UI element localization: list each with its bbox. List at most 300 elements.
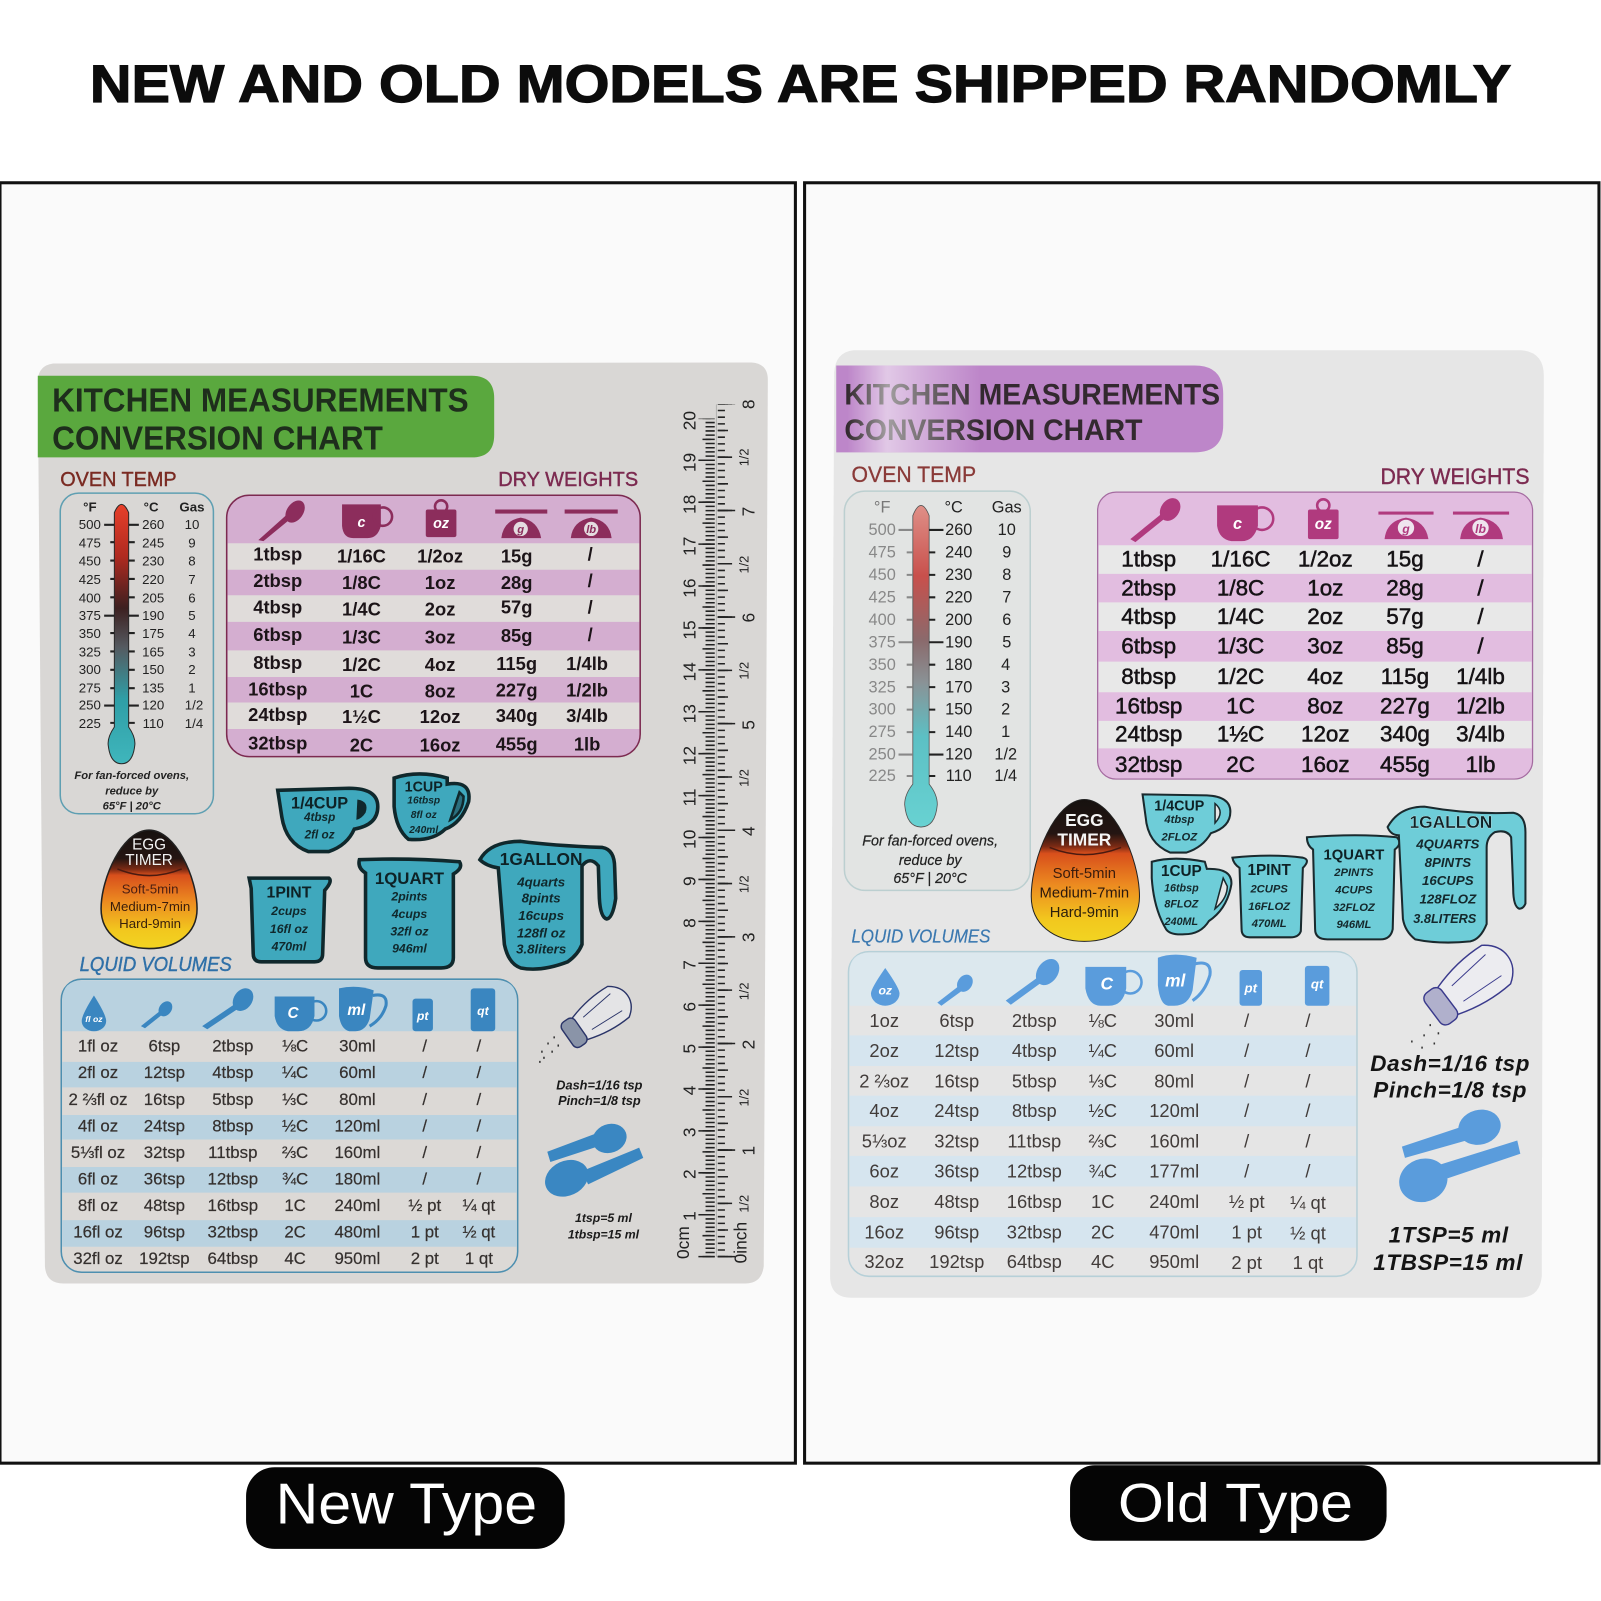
table: liquid volumes: / (422, 1143, 427, 1162)
heading: dry weights: DRY WEIGHTS (1380, 464, 1530, 489)
panel: oven temperature thermometer: 250 (79, 698, 101, 713)
table: dry weights: / (588, 544, 593, 565)
icon: gallon: 4QUARTS (1415, 836, 1480, 851)
table: liquid volumes: 180ml (334, 1169, 380, 1188)
icon: gallon: 3.8LITERS (1413, 911, 1477, 926)
table: liquid volumes: / (1244, 1160, 1250, 1181)
text: teaspoon equivalents: 1TBSP=15 ml (1373, 1250, 1523, 1275)
table: liquid volumes: ¼ qt (462, 1196, 496, 1215)
badge: new type: New Type (276, 1472, 537, 1536)
icon: quart: 946ML (1336, 919, 1372, 931)
icon: gallon: 128fl oz (517, 925, 566, 940)
text: dash and pinch (1370, 1051, 1530, 1103)
panel: oven temperature thermometer: 375 (79, 608, 101, 623)
table: liquid volumes: 950ml (334, 1249, 380, 1268)
table: liquid volumes: 480ml (334, 1223, 380, 1242)
table: liquid volumes: / (477, 1116, 482, 1135)
table: liquid volumes: 16tbsp (1007, 1191, 1062, 1212)
icon: gallon: 8PINTS (1425, 855, 1471, 870)
table: liquid volumes: 120ml (334, 1116, 380, 1135)
table: liquid volumes: 2 pt (411, 1249, 439, 1268)
table: dry weights: 1/2lb (566, 679, 608, 700)
icon: small spoon (141, 999, 175, 1028)
panel: oven temperature thermometer: 4 (188, 626, 196, 641)
panel: oven temperature thermometer: 260 (142, 517, 164, 532)
table: liquid volumes: ½C (1088, 1100, 1117, 1121)
table: liquid volumes: ½ qt (462, 1223, 496, 1242)
icon: quarter cup: 2FLOZ (1161, 831, 1198, 843)
table: liquid volumes: 80ml (339, 1090, 376, 1109)
icon: pint (1232, 856, 1307, 937)
badge: old type: Old Type (1118, 1471, 1353, 1533)
panel: oven temperature thermometer: 230 (945, 566, 972, 584)
icon: thermometer (104, 504, 139, 764)
table: dry weights: 57g (501, 597, 532, 618)
icon: one cup: 8FLOZ (1164, 899, 1199, 911)
table: liquid volumes: 32tsp (934, 1131, 979, 1152)
icon: scale lb: lb (1475, 522, 1486, 536)
table: liquid volumes: 96tsp (144, 1223, 185, 1242)
ruler: cm and inch scale: 2 (739, 1040, 759, 1049)
table: dry weights: 455g (496, 733, 538, 754)
panel: oven temperature thermometer: 9 (1002, 543, 1011, 561)
table: liquid volumes: 4C (1091, 1251, 1114, 1272)
icon: gallon (480, 841, 616, 969)
table: liquid volumes: / (1305, 1100, 1311, 1121)
panel: oven temperature thermometer: 2 (188, 662, 196, 677)
table: liquid volumes: 470ml (1149, 1222, 1199, 1243)
table: liquid volumes: ½ pt (1229, 1191, 1265, 1212)
panel: oven temperature thermometer: 475 (79, 535, 101, 550)
ruler: cm and inch scale: 1/2 (736, 556, 751, 574)
table: dry weights: 8oz (425, 680, 455, 701)
icon: large spoon (1006, 954, 1064, 1005)
panel: oven temperature thermometer: 205 (142, 590, 164, 605)
icon: can qt (471, 988, 495, 1031)
table: liquid volumes: / (477, 1143, 482, 1162)
table: dry weights: 1tbsp (1121, 547, 1176, 572)
ruler: cm and inch scale: 4 (739, 826, 759, 836)
panel: new type card (38, 362, 768, 1283)
text: teaspoon equivalents (568, 1211, 640, 1242)
table: liquid volumes: 11tbsp (1007, 1131, 1061, 1152)
table: dry weights: / (1477, 633, 1484, 658)
table: liquid volumes: 16tsp (144, 1090, 185, 1109)
ruler: cm and inch scale: 9 (679, 876, 699, 886)
icon: egg timer: Hard-9min (1050, 905, 1119, 921)
text: fan-forced note: For fan-forced ovens, (862, 833, 998, 849)
icon: salt shaker (539, 980, 639, 1062)
icon: cup: c (1233, 515, 1242, 533)
text: teaspoon equivalents: 1tsp=5 ml (575, 1211, 632, 1225)
table: liquid volumes: ½C (282, 1116, 308, 1135)
table: dry weights: 2tbsp (253, 570, 302, 591)
icon: small spoon (937, 972, 976, 1006)
table: dry weights: 2C (350, 734, 373, 755)
panel: oven temperature thermometer: 8 (1002, 566, 1011, 584)
icon: one cup: 16tbsp (1164, 882, 1199, 894)
table: liquid volumes: / (1244, 1100, 1250, 1121)
panel: oven temperature thermometer: 225 (869, 767, 896, 785)
table: dry weights: / (1477, 575, 1484, 600)
table: dry weights: 2tbsp (1121, 575, 1176, 600)
table: dry weights: 16tbsp (248, 678, 307, 699)
table: liquid volumes: ⅔C (1088, 1131, 1117, 1152)
panel: oven temperature thermometer: 5 (188, 608, 196, 623)
table: liquid volumes: 2 ⅔oz (859, 1070, 909, 1091)
table: liquid volumes: 2fl oz (78, 1063, 118, 1082)
table: liquid volumes: 4oz (869, 1100, 899, 1121)
ruler: cm and inch scale: 1 (739, 1146, 759, 1156)
icon: scale g: g (516, 524, 524, 536)
icon: quart: 2PINTS (1333, 867, 1374, 879)
table: liquid volumes: / (422, 1037, 427, 1056)
table: liquid volumes: 64tbsp (208, 1249, 258, 1268)
heading: oven temp: OVEN TEMP (852, 462, 976, 487)
icon: scale lb (1453, 512, 1509, 539)
table: liquid volumes: 240ml (1149, 1191, 1199, 1212)
table: dry weights: / (1477, 604, 1484, 629)
ruler: cm and inch scale: 1/2 (736, 983, 751, 1000)
ruler: cm and inch scale: 20 (679, 411, 699, 430)
panel: oven temperature thermometer: 1/2 (994, 746, 1017, 764)
table: liquid volumes: ⅓C (1088, 1070, 1117, 1091)
icon: scale g (495, 510, 547, 538)
ruler: cm and inch scale: 5 (679, 1044, 699, 1053)
banner: green heading: KITCHEN MEASUREMENTS (52, 382, 469, 419)
table: liquid volumes: 36tsp (144, 1169, 185, 1188)
panel: oven temperature thermometer: 230 (142, 554, 164, 569)
table: dry weights: 1/16C (1211, 547, 1271, 572)
text: dash and pinch (556, 1077, 643, 1108)
table: liquid volumes: / (1305, 1070, 1311, 1091)
icon: quarter cup: 2fl oz (304, 828, 335, 841)
icon: cup c: C (288, 1005, 300, 1022)
table: dry weights: 28g (1386, 575, 1424, 600)
ruler: cm and inch scale: 16 (679, 578, 699, 598)
table: liquid volumes: 32fl oz (73, 1249, 123, 1268)
table: dry weights: 4oz (425, 654, 455, 675)
icon: egg timer: Soft-5min (122, 881, 178, 896)
panel: oven temperature thermometer: 2 (1001, 701, 1010, 719)
table: dry weights: 1C (1226, 694, 1255, 719)
table: liquid volumes: 192tsp (929, 1251, 984, 1272)
ruler: cm and inch scale: 2 (679, 1169, 699, 1179)
table: liquid volumes: 30ml (339, 1037, 376, 1056)
table: liquid volumes: ¼C (1088, 1040, 1117, 1061)
ruler: cm and inch scale: 8 (679, 918, 699, 928)
panel: oven temperature thermometer: 7 (1002, 588, 1011, 606)
table: dry weights: 1½C (342, 706, 381, 727)
table: dry weights (1098, 492, 1533, 779)
table: dry weights: 1/16C (337, 546, 386, 567)
table: liquid volumes: 30ml (1154, 1010, 1194, 1031)
ruler: cm and inch scale: 3 (739, 932, 759, 942)
icon: drop: oz (878, 983, 893, 997)
table: liquid volumes: / (477, 1037, 482, 1056)
icon: large spoon (202, 984, 258, 1029)
table: dry weights: 3/4lb (1456, 721, 1505, 746)
table: liquid volumes: 160ml (1149, 1131, 1199, 1152)
table: liquid volumes: 12tsp (934, 1040, 979, 1061)
table: liquid volumes: ¾C (282, 1169, 308, 1188)
table: liquid volumes: 5⅓fl oz (71, 1143, 125, 1162)
table: liquid volumes: ⅓C (282, 1090, 308, 1109)
icon: quart: 2pints (390, 890, 428, 904)
table: dry weights: 1lb (1466, 752, 1496, 777)
table: dry weights: / (588, 624, 593, 645)
panel: oven temperature thermometer: 170 (945, 678, 972, 696)
panel: oven temperature thermometer: 3 (1001, 678, 1010, 696)
ruler: cm and inch scale: 1/2 (736, 449, 751, 466)
icon: scale g (1378, 512, 1434, 539)
table: liquid volumes: 8oz (869, 1191, 899, 1212)
table: liquid volumes: 8fl oz (78, 1196, 118, 1215)
ruler: cm and inch scale: 1/2 (736, 875, 751, 893)
panel: oven temperature thermometer: 400 (869, 611, 896, 629)
table: liquid volumes: 5⅓oz (862, 1131, 907, 1152)
panel: oven temperature thermometer: 1 (1001, 723, 1010, 741)
icon: quart: 4CUPS (1334, 884, 1373, 896)
table: dry weights: 4tbsp (1121, 604, 1176, 629)
panel: oven temperature thermometer: 120 (945, 746, 972, 764)
icon: egg timer: Hard-9min (119, 916, 181, 931)
table: dry weights: 1½C (1217, 721, 1264, 746)
table: liquid volumes: 6tsp (148, 1037, 180, 1056)
table: liquid volumes: 8tbsp (212, 1116, 253, 1135)
table: liquid volumes: 6oz (869, 1160, 899, 1181)
ruler: cm and inch scale: 0inch (730, 1222, 750, 1263)
table: liquid volumes: 240ml (334, 1196, 380, 1215)
panel: oven temperature thermometer: 475 (869, 543, 896, 561)
icon: gallon: 128FLOZ (1419, 892, 1477, 907)
text: fan-forced note (74, 770, 189, 813)
icons: dry weights header (1130, 494, 1509, 542)
table: dry weights: 1/2oz (417, 546, 463, 567)
table: liquid volumes: 5tbsp (1012, 1070, 1057, 1091)
table: liquid volumes: 2 ⅔fl oz (69, 1090, 127, 1109)
text: fan-forced note: 65°F | 20°C (103, 801, 162, 813)
icon: weight bag: oz (433, 516, 450, 532)
panel: oven temperature thermometer: 425 (869, 588, 896, 606)
ruler: cm and inch scale: 14 (679, 662, 699, 681)
table: liquid volumes: 2C (1091, 1222, 1114, 1243)
icon: egg timer: Medium-7min (110, 899, 190, 914)
table: dry weights: 24tbsp (1115, 721, 1182, 746)
icon: egg timer: EGG (132, 837, 166, 854)
icon: gallon: 8pints (522, 891, 561, 906)
panel: oven temperature thermometer: 120 (142, 698, 164, 713)
table: liquid volumes: 2C (284, 1223, 306, 1242)
table: liquid volumes: 60ml (1154, 1040, 1194, 1061)
table: dry weights: 15g (501, 546, 532, 567)
table: liquid volumes: 16oz (864, 1222, 904, 1243)
table: liquid volumes: 32tbsp (208, 1223, 258, 1242)
table: liquid volumes: / (1305, 1010, 1311, 1031)
table: dry weights (227, 495, 640, 757)
table: dry weights: 2oz (425, 599, 455, 620)
table: liquid volumes: 6tsp (939, 1010, 974, 1031)
badge: new type (246, 1467, 565, 1549)
panel: old type card (830, 350, 1544, 1298)
table: liquid volumes: 1 qt (465, 1249, 493, 1268)
panel: oven temperature thermometer: 350 (79, 626, 101, 641)
table: liquid volumes: 96tsp (934, 1222, 979, 1243)
text: dash and pinch: Pinch=1/8 tsp (1373, 1078, 1526, 1103)
table: dry weights: / (588, 570, 593, 591)
icon: salt shaker (1411, 936, 1522, 1048)
table: dry weights: 1/4lb (566, 653, 608, 674)
banner: purple heading: KITCHEN MEASUREMENTS (844, 378, 1220, 411)
panel: oven temperature thermometer: 1/4 (994, 767, 1017, 785)
icon: cup: c (357, 515, 365, 531)
panel: oven temperature thermometer: 135 (142, 680, 164, 695)
icon: gallon (1388, 807, 1525, 943)
panel: oven temperature thermometer: 220 (142, 572, 164, 587)
text: dash and pinch: Pinch=1/8 tsp (558, 1093, 641, 1108)
text: fan-forced note: 65°F | 20°C (893, 871, 968, 887)
icon: gallon: 3.8liters (516, 942, 566, 957)
table: dry weights: 1/4lb (1456, 664, 1505, 689)
text: teaspoon equivalents: 1tbsp=15 ml (568, 1228, 640, 1242)
table: dry weights: / (1477, 547, 1484, 572)
table: dry weights: 455g (1380, 752, 1430, 777)
icon: pint: 16FLOZ (1248, 901, 1291, 913)
table: liquid volumes: 16fl oz (73, 1223, 123, 1242)
table: dry weights: 1/4C (342, 599, 381, 620)
panel: oven temperature thermometer: °F (874, 499, 890, 517)
table: dry weights: / (588, 597, 593, 618)
icon: spoon (1130, 494, 1185, 542)
table: liquid volumes: / (1305, 1131, 1311, 1152)
table: liquid volumes: / (1305, 1040, 1311, 1061)
panel: oven temperature thermometer: 300 (869, 701, 896, 719)
icon: weight bag: oz (1315, 516, 1332, 533)
icon: one cup: 16tbsp (407, 796, 440, 807)
panel: oven temperature thermometer: 325 (869, 678, 896, 696)
panel: oven temperature thermometer: 325 (79, 645, 101, 660)
icon: scale g: g (1401, 522, 1410, 536)
ruler: cm and inch scale: 1/2 (736, 1089, 751, 1106)
icon: one cup (1152, 859, 1231, 934)
icon: pint: 1PINT (267, 884, 312, 901)
icon: gallon: 16CUPS (1422, 873, 1474, 888)
icon: can qt: qt (477, 1004, 490, 1018)
table: dry weights: 1/3C (342, 626, 381, 647)
banner: purple heading: CONVERSION CHART (844, 414, 1143, 447)
ruler: cm and inch scale: 17 (679, 537, 699, 556)
table: dry weights: 12oz (1301, 721, 1350, 746)
icon: one cup: 8fl oz (411, 810, 438, 821)
table: liquid volumes: 4tbsp (1012, 1040, 1057, 1061)
icon: pint: 1PINT (1247, 862, 1291, 879)
icon: quarter cup (1143, 794, 1230, 853)
table: liquid volumes: 11tbsp (208, 1143, 257, 1162)
table: liquid volumes: / (477, 1169, 482, 1188)
icon: pint: 470ml (271, 940, 307, 954)
panel: oven temperature thermometer: 450 (869, 566, 896, 584)
icons: liquid header (871, 954, 1329, 1006)
table: liquid volumes (61, 979, 518, 1272)
table: liquid volumes: 1fl oz (78, 1037, 118, 1056)
panel: oven temperature thermometer: 3 (188, 645, 196, 660)
table: dry weights: 3/4lb (566, 705, 608, 726)
panel: oven temperature thermometer (844, 491, 1030, 890)
panel: oven temperature thermometer: 180 (945, 656, 972, 674)
icon: gallon: 4quarts (516, 874, 565, 889)
icon: quart: 946ml (392, 942, 427, 956)
panel: oven temperature thermometer: 190 (945, 633, 972, 651)
panel: oven temperature thermometer: 150 (945, 701, 972, 719)
ruler: cm and inch scale: 6 (739, 613, 759, 623)
panel: oven temperature thermometer: 275 (869, 723, 896, 741)
table: liquid volumes: ⅛C (282, 1037, 308, 1056)
table: dry weights: 16oz (1301, 752, 1350, 777)
table: dry weights: 85g (501, 625, 532, 646)
table: dry weights: 2oz (1307, 604, 1343, 629)
table: liquid volumes: 1 qt (1293, 1252, 1323, 1273)
table: liquid volumes: 60ml (339, 1063, 376, 1082)
table: liquid volumes: 5tbsp (212, 1090, 253, 1109)
table: liquid volumes: ¾C (1088, 1160, 1117, 1181)
icon: can pt (413, 999, 433, 1031)
table: liquid volumes: 4tbsp (212, 1063, 253, 1082)
icon: spoon (258, 497, 309, 541)
table: liquid volumes: / (477, 1063, 482, 1082)
table: dry weights: 4oz (1307, 664, 1343, 689)
icon: measuring spoons (539, 1119, 643, 1204)
icon: quart (1307, 835, 1399, 939)
icon: mug ml: ml (347, 1002, 366, 1019)
table: liquid volumes: 48tsp (144, 1196, 185, 1215)
icon: scale lb: lb (586, 524, 596, 536)
table: liquid volumes: 48tsp (934, 1191, 979, 1212)
icon: one cup (394, 774, 469, 840)
icon: gallon: 1GALLON (500, 849, 583, 869)
table: dry weights: 1oz (1307, 575, 1343, 600)
panel: oven temperature thermometer: 220 (945, 588, 972, 606)
table: dry weights: 1tbsp (253, 544, 302, 565)
icon: egg timer (1031, 799, 1139, 941)
table: liquid volumes: 12tsp (144, 1063, 185, 1082)
table: liquid volumes: 12tbsp (1007, 1160, 1062, 1181)
panel: oven temperature thermometer: °F (83, 500, 97, 515)
icon: pint: 2cups (270, 904, 307, 918)
panel: oven temperature thermometer: °C (144, 500, 159, 515)
icon: mug ml (339, 987, 386, 1031)
ruler: cm and inch scale (673, 400, 759, 1263)
icon: cup c (1085, 967, 1142, 1006)
table: dry weights: 6tbsp (1121, 633, 1176, 658)
table: liquid volumes: 32oz (864, 1251, 904, 1272)
table: liquid volumes: ⅔C (282, 1143, 308, 1162)
icon: weight bag (426, 500, 456, 537)
heading: oven temp: OVEN TEMP (60, 469, 177, 491)
icons: dry weights header (258, 497, 618, 541)
table: dry weights: 6tbsp (253, 624, 302, 645)
table: liquid volumes: / (422, 1063, 427, 1082)
table: liquid volumes: 32tsp (144, 1143, 185, 1162)
icon: egg timer: Soft-5min (1053, 866, 1116, 882)
table: dry weights: 32tbsp (1115, 752, 1182, 777)
table: dry weights: 3oz (425, 626, 455, 647)
table: liquid volumes: / (422, 1169, 427, 1188)
table: dry weights: 1/2oz (1298, 547, 1353, 572)
table: liquid volumes: 192tsp (139, 1249, 190, 1268)
icon: one cup: 1CUP (1161, 863, 1202, 880)
icon: quarter cup: 1/4CUP (291, 795, 348, 813)
table: dry weights: 1/3C (1217, 633, 1264, 658)
